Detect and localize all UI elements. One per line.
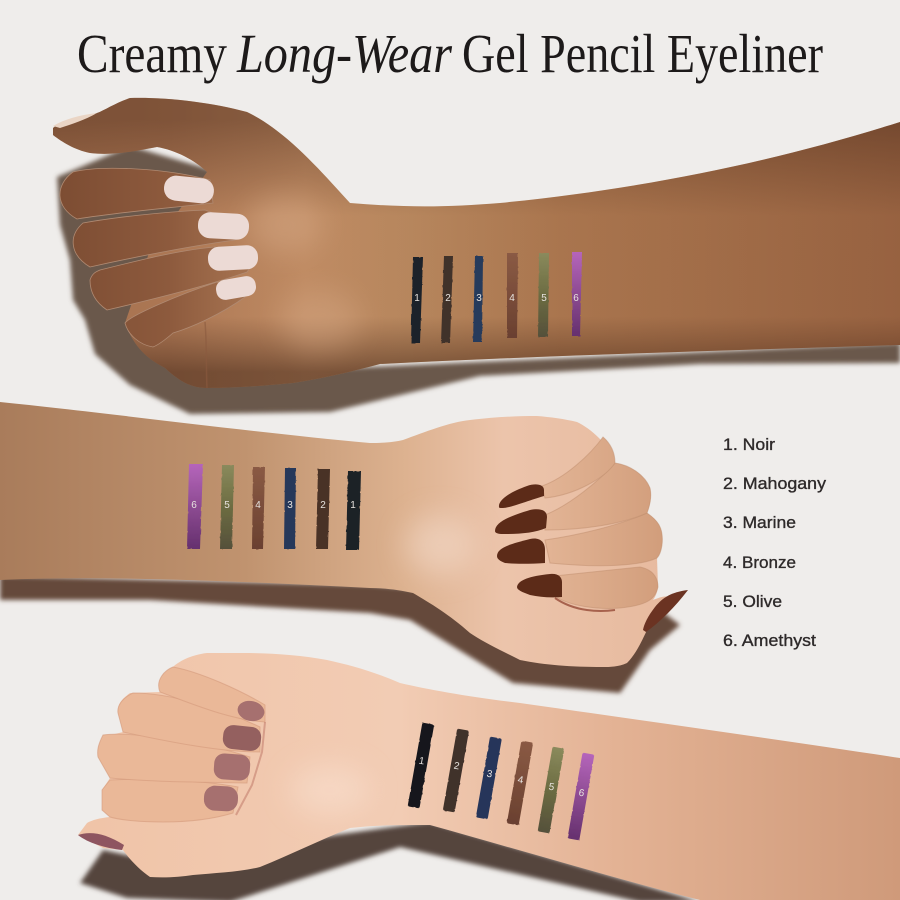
forearm and hand (78, 653, 900, 900)
swatch 5 olive: 5 (548, 782, 556, 794)
swatch 1 noir (346, 471, 361, 550)
swatch 6 amethyst (187, 464, 203, 549)
fingers (98, 667, 265, 822)
legend: shade names: 1. Noir (723, 435, 775, 454)
swatch 4 bronze: 4 (509, 293, 515, 304)
shading over arm (53, 98, 900, 388)
swatch 2 mahogany (316, 469, 330, 549)
legend: shade names: 2. Mahogany (723, 474, 827, 493)
thumbnail (53, 113, 97, 128)
legend: shade names: 5. Olive (723, 592, 782, 611)
swatches on top arm (411, 252, 582, 343)
highlights on back of hand (247, 197, 323, 253)
swatch 2 mahogany: 2 (320, 500, 326, 511)
swatch 5 olive (538, 747, 564, 833)
swatch 6 amethyst (567, 753, 594, 840)
swatch 1 noir (408, 723, 434, 808)
fingernails: dark brown (495, 484, 688, 632)
swatch 2 mahogany (441, 256, 453, 343)
fingers (542, 437, 662, 608)
swatch 3 marine: 3 (486, 769, 494, 781)
legend: shade names: 6. Amethyst (723, 631, 816, 650)
swatch 4 bronze (507, 253, 518, 338)
swatch 3 marine (476, 737, 502, 819)
swatch 6 amethyst: 6 (573, 293, 579, 304)
swatch 4 bronze (252, 467, 265, 549)
swatch 4 bronze: 4 (255, 500, 261, 511)
fingers (60, 168, 257, 347)
swatch 3 marine: 3 (476, 293, 482, 304)
swatch 4 bronze: 4 (517, 775, 525, 787)
swatch 2 mahogany: 2 (453, 761, 461, 773)
palm crease (205, 322, 207, 388)
swatch 2 mahogany (443, 729, 469, 812)
swatch 5 olive: 5 (541, 293, 547, 304)
legend: shade names: 3. Marine (723, 513, 796, 532)
legend: shade names: 4. Bronze (723, 553, 796, 572)
swatch 5 olive (538, 253, 549, 337)
swatch 1 noir (411, 257, 423, 343)
arm 1: top arm, deep skin tone (53, 98, 900, 388)
shadow gap above thumb (555, 598, 615, 611)
swatch 3 marine: 3 (287, 500, 293, 511)
swatch 6 amethyst (572, 252, 582, 336)
swatch 5 olive: 5 (224, 500, 230, 511)
title (77, 23, 823, 84)
swatch 3 marine (284, 468, 296, 549)
swatch 2 mahogany: 2 (445, 293, 451, 304)
swatch 5 olive (220, 465, 234, 549)
swatch 3 marine (473, 256, 483, 342)
swatch 1 noir: 1 (350, 500, 356, 511)
forearm and hand (0, 402, 670, 667)
title: Creamy (77, 23, 227, 84)
legend: shade names (723, 435, 827, 650)
forearm and hand (53, 98, 900, 388)
title: Long-Wear (236, 23, 453, 84)
fingernails: mauve (78, 698, 266, 850)
swatches on lower arm (408, 723, 594, 840)
shadow under fingers (236, 722, 265, 815)
swatch 4 bronze (507, 741, 533, 825)
title: Gel Pencil Eyeliner (462, 23, 823, 84)
arm 2: middle arm, medium skin tone (0, 402, 688, 667)
swatch 1 noir: 1 (418, 756, 426, 768)
swatch 6 amethyst: 6 (578, 788, 586, 800)
swatch 1 noir: 1 (414, 293, 420, 304)
palm highlight (405, 515, 475, 575)
swatches on middle arm (187, 464, 361, 550)
swatch 6 amethyst: 6 (191, 500, 197, 511)
fingernails: pale pink (163, 174, 259, 301)
palm highlight (290, 765, 370, 815)
arm 3: lower arm, light skin tone (78, 653, 900, 900)
